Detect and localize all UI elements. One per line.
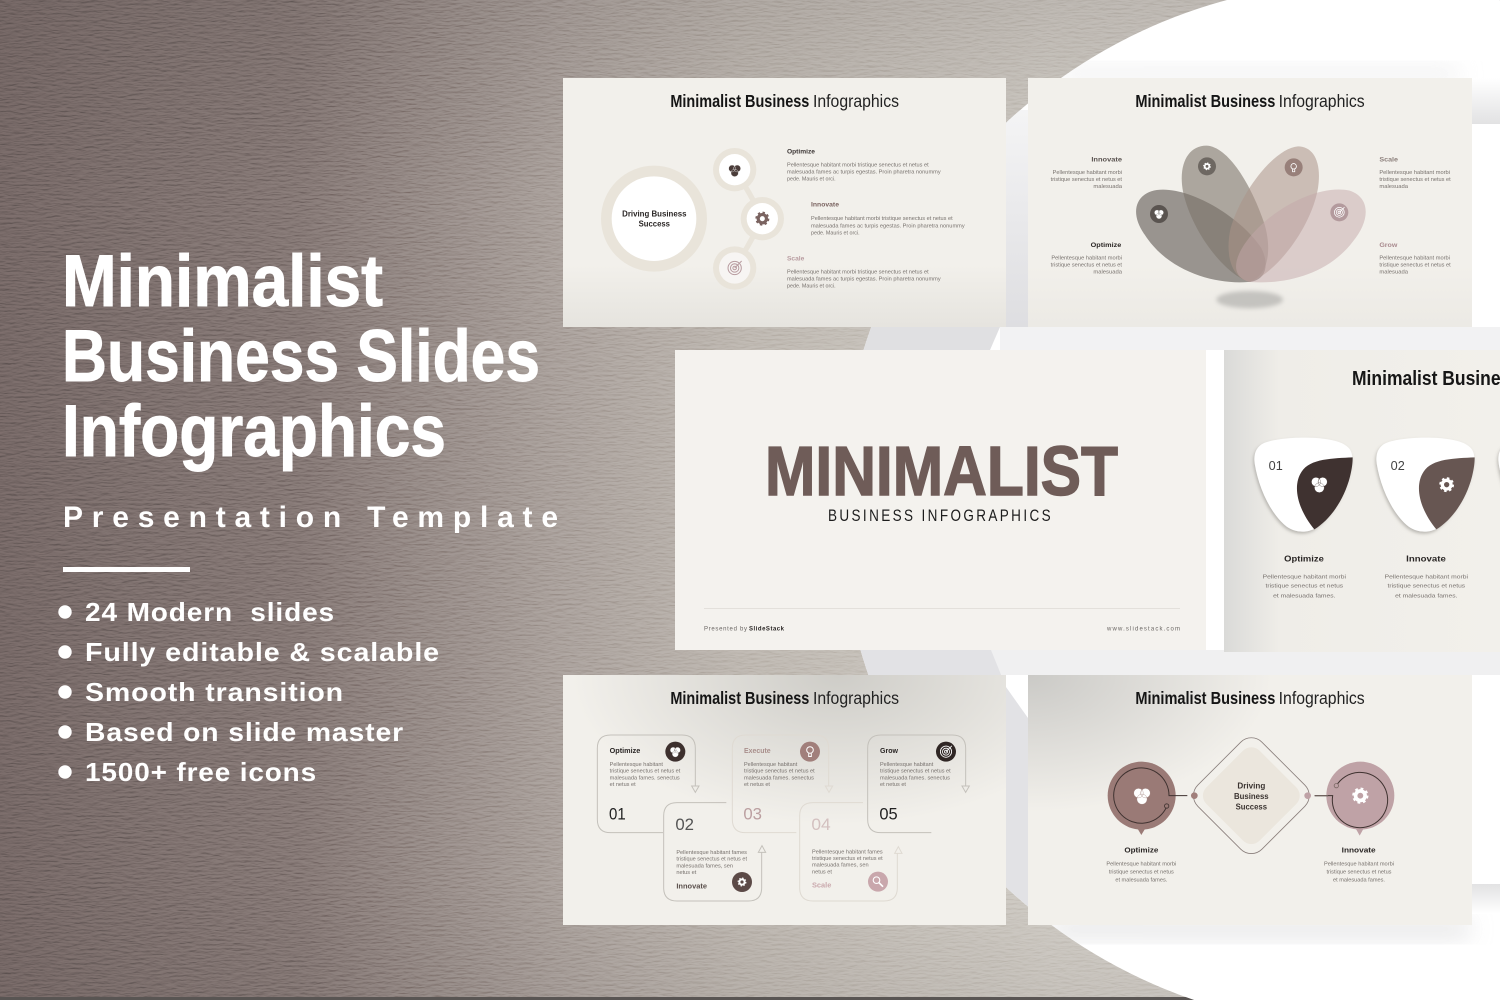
- panel: slide with five stepped cards: 01: [609, 804, 626, 823]
- panel: slide with diamond and two circles: tristique senectus et netus: [1326, 869, 1392, 875]
- white circle behind slides: [840, 0, 1500, 1000]
- panel: right slide with numbered plates, cropped: tristique senectus et netus: [1265, 584, 1344, 590]
- panel: slide with diamond and two circles: Pellentesque habitant morbi: [1324, 862, 1394, 868]
- panel: slide with five stepped cards: et netus et: [744, 782, 771, 788]
- panel: slide with five stepped cards: malesuada fames. senectus: [744, 775, 814, 781]
- panel: slide with petal diagram: tristique senectus et netus et: [1379, 177, 1451, 183]
- panel: right slide with numbered plates, cropped: Pellentesque habitant morbi: [1263, 574, 1346, 580]
- feature list: [58, 597, 440, 787]
- panel: slide with petal diagram: Pellentesque habitant morbi: [1379, 255, 1450, 261]
- panel: slide with five stepped cards: Optimize: [610, 748, 640, 755]
- panel: right slide with numbered plates, cropped: Innovate: [1406, 554, 1446, 564]
- feature list: 24 Modern slides: [85, 597, 335, 627]
- panel: slide with five stepped cards: netus et: [812, 869, 833, 875]
- panel: slide with driving business success circles: Pellentesque habitant morbi tristique senectus et netus et: [787, 269, 929, 275]
- heading: main title: Minimalist: [62, 241, 383, 322]
- panel: right slide with numbered plates, cropped: Pellentesque habitant morbi: [1385, 574, 1468, 580]
- panel: slide with petal diagram: Scale: [1379, 157, 1399, 163]
- panel: slide with five stepped cards: Pellentesque habitant fames: [812, 849, 883, 855]
- panel: slide with petal diagram: Innovate: [1091, 157, 1123, 163]
- panel: central cover slide: MINIMALIST: [765, 432, 1118, 510]
- panel: slide with diamond and two circles: Innovate: [1342, 845, 1376, 854]
- feature list: 1500+ free icons: [85, 757, 317, 787]
- panel: slide with petal diagram: malesuada: [1379, 184, 1408, 190]
- panel: slide with petal diagram: tristique senectus et netus et: [1379, 262, 1451, 268]
- panel: slide with driving business success circles: Pellentesque habitant morbi tristique senectus et netus et: [787, 162, 929, 168]
- panel: slide with driving business success circles: Success: [639, 219, 670, 229]
- panel: right slide with numbered plates, cropped: 01: [1269, 459, 1283, 473]
- panel: slide with driving business success circles: pede. Mauris et orci.: [787, 284, 836, 290]
- feature list: Smooth transition: [85, 677, 344, 707]
- panel: slide with five stepped cards: Grow: [880, 748, 899, 755]
- panel: slide with driving business success circles: Innovate: [811, 203, 840, 209]
- panel: slide with diamond and two circles: Business: [1234, 791, 1269, 801]
- panel: slide with petal diagram: Grow: [1379, 243, 1398, 249]
- panel: slide with driving business success circles: malesuada fames ac turpis egestas. Proin pharetra nonummy: [787, 277, 941, 283]
- heading: main title: Business Slides: [62, 316, 540, 397]
- panel: slide with five stepped cards: Pellentesque habitant: [744, 762, 798, 768]
- panel: central cover slide: [675, 350, 1206, 650]
- panel: slide with driving business success circles: Scale: [787, 256, 805, 262]
- feature list: Based on slide master: [85, 717, 404, 747]
- panel: slide with diamond and two circles: et malesuada fames.: [1115, 877, 1167, 883]
- panel: slide with diamond and two circles: tristique senectus et netus: [1109, 869, 1174, 875]
- panel: slide with five stepped cards: Scale: [812, 883, 831, 890]
- panel: slide with five stepped cards: Pellentesque habitant: [880, 762, 934, 768]
- panel: slide with driving business success circles: Pellentesque habitant morbi tristique senectus et netus et: [811, 216, 953, 222]
- panel: slide with driving business success circles: Optimize: [787, 149, 816, 155]
- panel: slide with driving business success circles: Infographics: [813, 91, 899, 111]
- heading: main title: [62, 241, 540, 472]
- panel: slide with petal diagram: tristique senectus et netus et: [1051, 177, 1123, 183]
- panel: slide with petal diagram: Optimize: [1091, 243, 1122, 249]
- panel: slide with five stepped cards: Pellentesque habitant fames: [676, 850, 747, 856]
- panel: slide with petal diagram: Pellentesque habitant morbi: [1379, 170, 1450, 176]
- panel: slide with diamond and two circles: Pellentesque habitant morbi: [1106, 862, 1176, 868]
- panel: slide with five stepped cards: Execute: [744, 748, 771, 755]
- panel: slide with petal diagram: tristique senectus et netus et: [1051, 262, 1123, 268]
- panel: slide with five stepped cards: [563, 675, 1006, 925]
- panel: slide with diamond and two circles: Driving: [1237, 781, 1265, 791]
- panel: slide with five stepped cards: Innovate: [676, 883, 707, 890]
- panel: slide with five stepped cards: tristique senectus et netus et: [812, 856, 883, 862]
- panel: slide with five stepped cards: tristique senectus et netus et: [610, 769, 681, 775]
- feature list: Fully editable & scalable: [85, 637, 440, 667]
- panel: slide with five stepped cards: tristique senectus et netus et: [880, 769, 951, 775]
- panel: slide with diamond and two circles: [1028, 675, 1472, 925]
- panel: right slide with numbered plates, cropped: tristique senectus et netus: [1387, 584, 1466, 590]
- panel: slide with driving business success circles: malesuada fames ac turpis egestas. Proin pharetra nonummy: [811, 223, 965, 229]
- panel: slide with diamond and two circles: et malesuada fames.: [1333, 877, 1385, 883]
- panel: slide with driving business success circles: Driving Business: [622, 208, 687, 218]
- panel: right slide with numbered plates, cropped: et malesuada fames.: [1395, 593, 1457, 599]
- panel: slide with five stepped cards: Minimalist Business: [670, 688, 809, 708]
- panel: slide with petal diagram: [1028, 78, 1472, 327]
- panel: central cover slide: BUSINESS INFOGRAPHICS: [828, 506, 1053, 525]
- panel: slide with driving business success circles: pede. Mauris et orci.: [811, 230, 860, 236]
- panel: slide with petal diagram: Pellentesque habitant morbi: [1053, 170, 1122, 176]
- panel: right slide with numbered plates, cropped: 02: [1391, 459, 1405, 473]
- panel: slide with five stepped cards: malesuada fames. senectus: [880, 775, 950, 781]
- panel: slide with five stepped cards: malesuada fames, sen: [676, 863, 733, 869]
- panel: slide with five stepped cards: et netus et: [880, 782, 907, 788]
- panel: slide with five stepped cards: malesuada fames. senectus: [610, 775, 680, 781]
- panel: right slide with numbered plates, cropped: [1224, 350, 1500, 652]
- panel: slide with diamond and two circles: Infographics: [1279, 688, 1365, 708]
- panel: slide with five stepped cards: 03: [743, 804, 762, 823]
- panel: slide with driving business success circles: [563, 78, 1006, 327]
- panel: slide with five stepped cards: malesuada fames, sen: [812, 863, 869, 869]
- panel: slide with diamond and two circles: Success: [1236, 801, 1267, 811]
- panel: slide with driving business success circles: pede. Mauris et orci.: [787, 177, 836, 183]
- panel: slide with five stepped cards: netus et: [676, 870, 697, 876]
- panel: slide with five stepped cards: Pellentesque habitant: [610, 762, 664, 768]
- panel: slide with driving business success circles: Minimalist Business: [670, 91, 809, 111]
- panel: slide with five stepped cards: 02: [675, 815, 694, 834]
- panel: central cover slide: www.slidestack.com: [1106, 626, 1180, 632]
- panel: slide with petal diagram: Minimalist Business: [1135, 91, 1275, 111]
- panel: slide with petal diagram: malesuada: [1379, 269, 1408, 275]
- panel: slide with petal diagram: malesuada: [1093, 184, 1122, 190]
- subtitle: Presentation Template: [63, 501, 558, 534]
- panel: slide with petal diagram: Pellentesque habitant morbi: [1051, 255, 1122, 261]
- panel: slide with five stepped cards: 05: [879, 804, 898, 823]
- panel: slide with five stepped cards: tristique senectus et netus et: [744, 769, 815, 775]
- panel: right slide with numbered plates, cropped: et malesuada fames.: [1273, 593, 1335, 599]
- panel: slide with five stepped cards: Infographics: [813, 688, 899, 708]
- panel: slide with petal diagram: Infographics: [1279, 91, 1365, 111]
- panel: slide with diamond and two circles: Optimize: [1124, 845, 1158, 854]
- panel: slide with five stepped cards: tristique senectus et netus et: [676, 857, 748, 863]
- panel: central cover slide: SlideStack: [749, 626, 785, 632]
- heading: main title: Infographics: [62, 391, 446, 472]
- panel: central cover slide: Presented by: [704, 626, 747, 632]
- divider rule: [63, 567, 190, 572]
- panel: slide with five stepped cards: et netus et: [610, 782, 636, 788]
- panel: slide with five stepped cards: 04: [811, 815, 831, 834]
- panel: slide with driving business success circles: malesuada fames ac turpis egestas. Proin pharetra nonummy: [787, 170, 941, 176]
- panel: right slide with numbered plates, cropped: Optimize: [1284, 554, 1324, 564]
- panel: slide with petal diagram: malesuada: [1093, 269, 1122, 275]
- panel: slide with diamond and two circles: Minimalist Business: [1135, 688, 1275, 708]
